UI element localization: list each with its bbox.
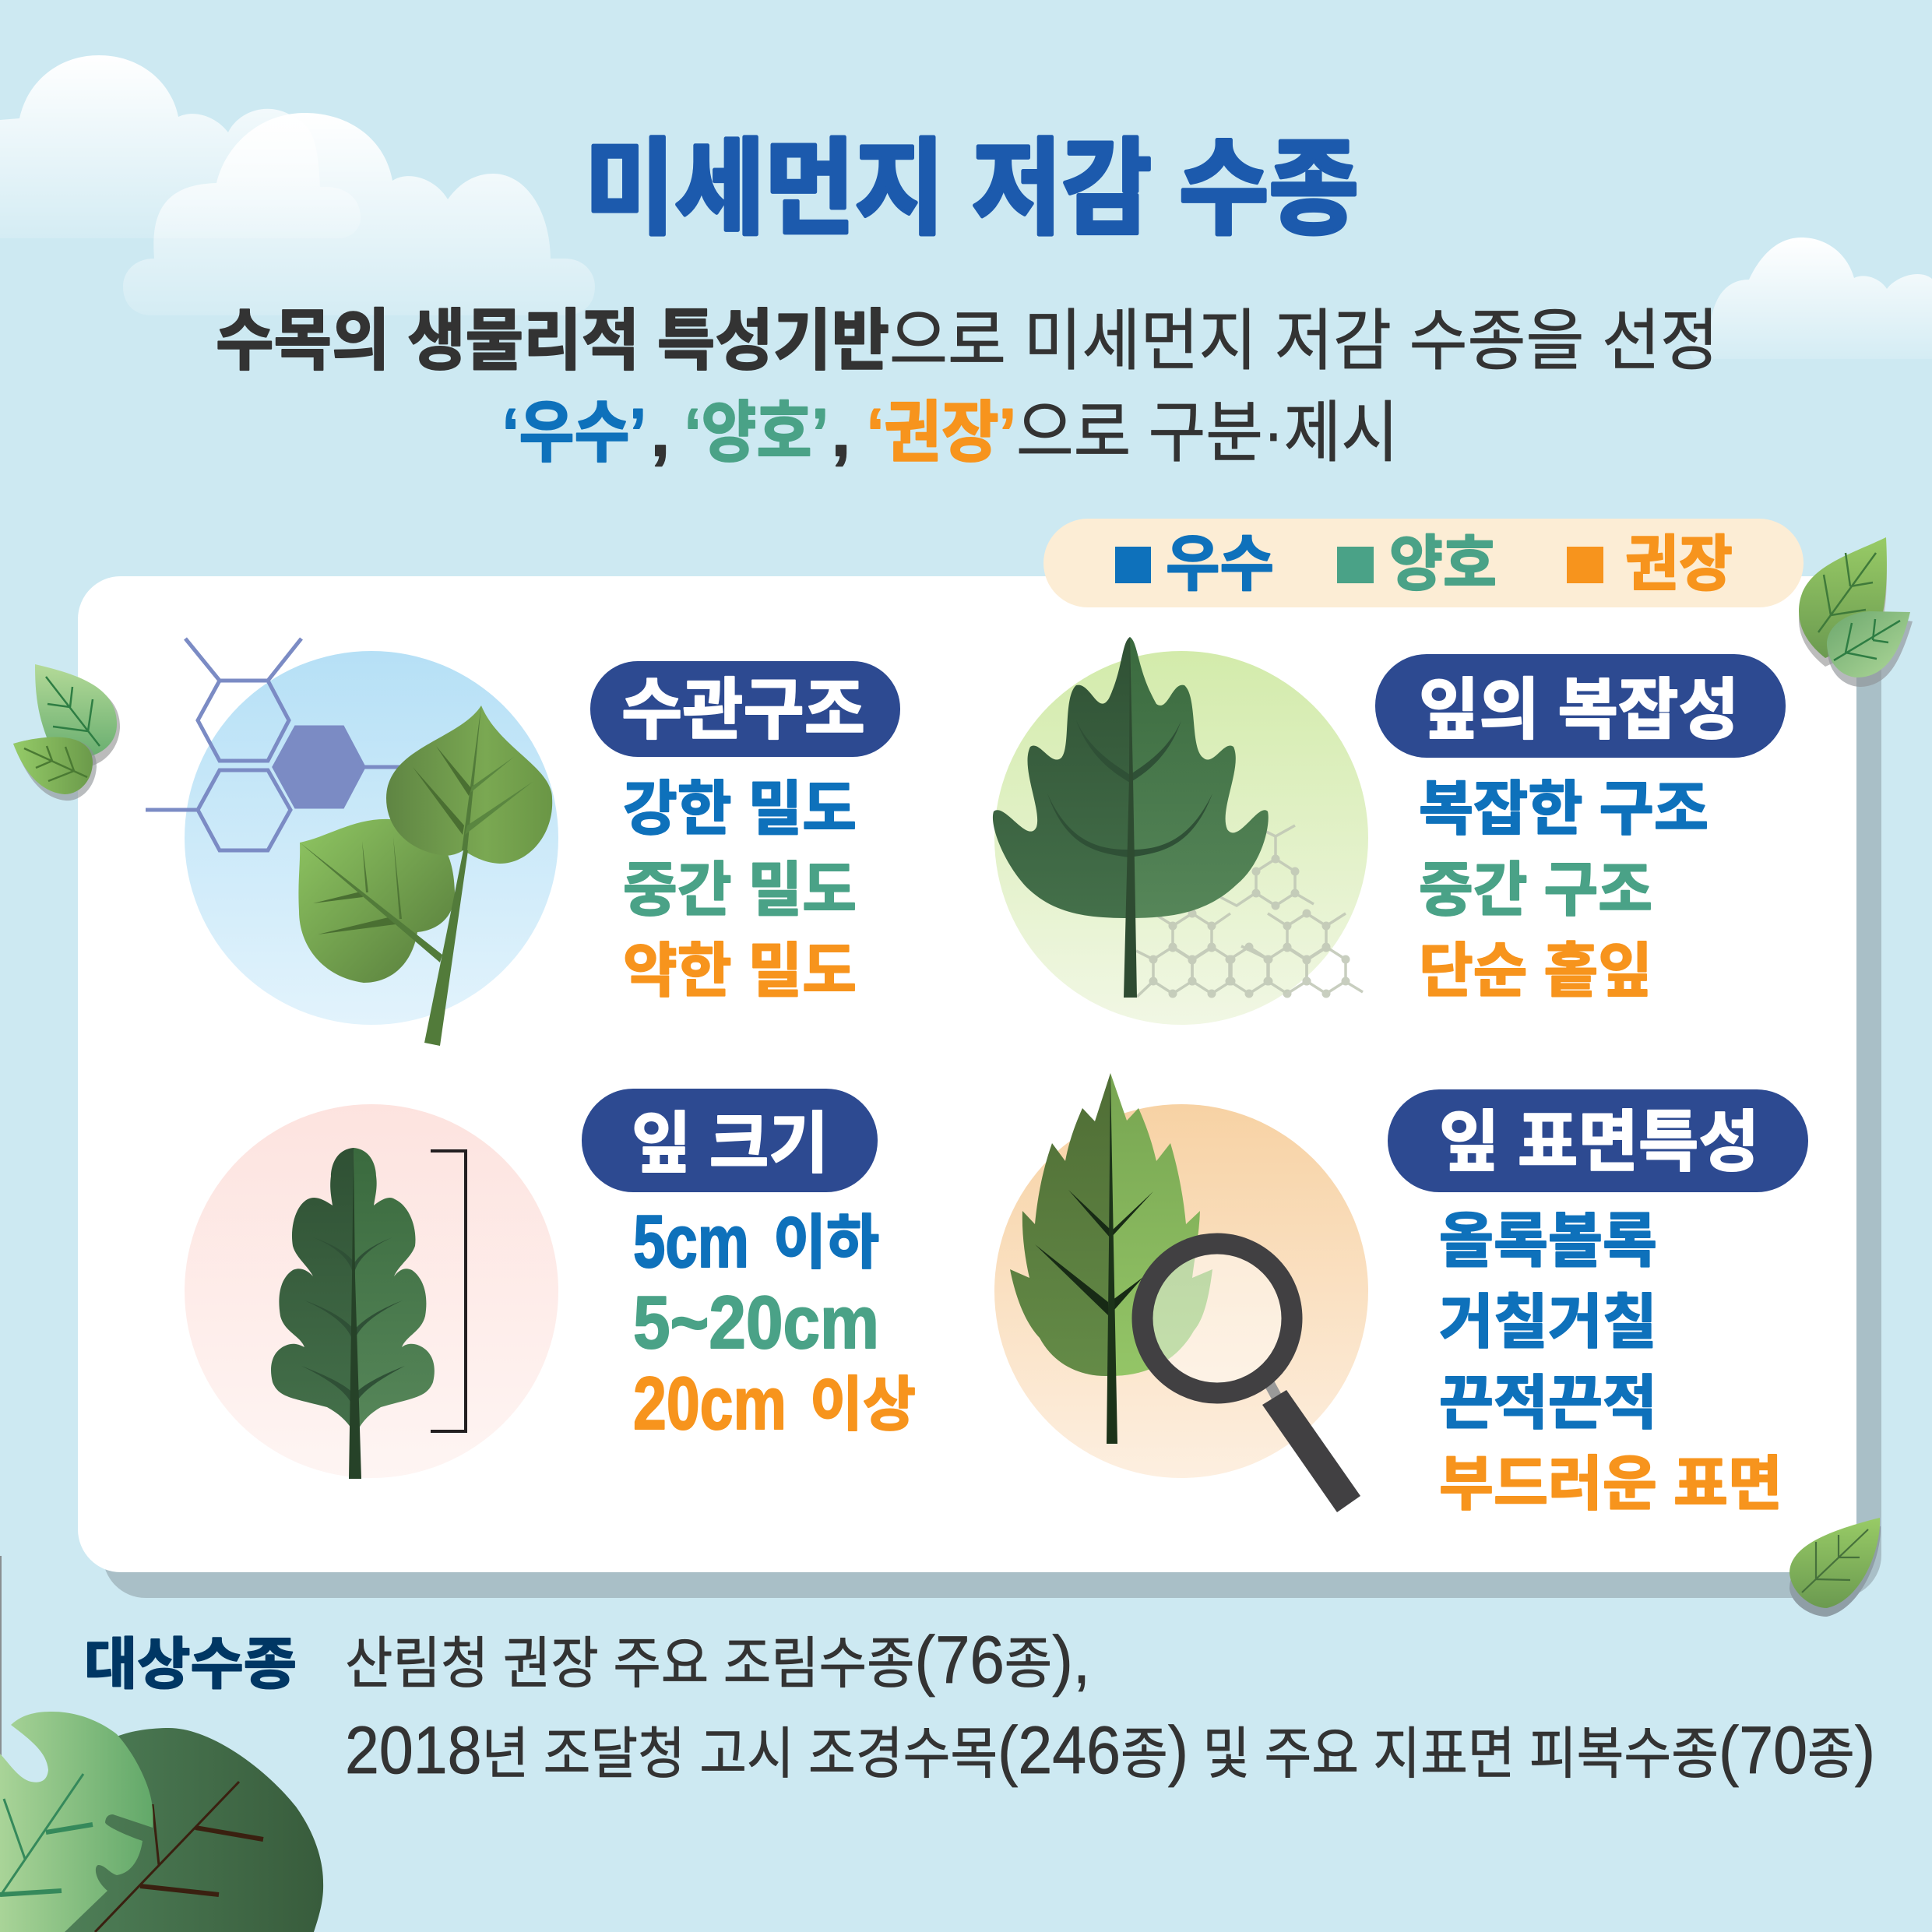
panel: white card with shadow (78, 576, 1881, 1598)
pill heading: 수관구조 (621, 673, 865, 748)
panel: leaf surface (994, 1073, 1808, 1518)
options: 거칠거칠 (1439, 1290, 1657, 1356)
panel: leaf size (185, 1089, 916, 1479)
subtitle: 으로 미세먼지 저감 수종을 선정 (889, 304, 1719, 378)
options (623, 776, 857, 1005)
legend: 권장 (1625, 530, 1733, 598)
icon: toothed leaf (1010, 1073, 1212, 1444)
options: 5~20cm (633, 1281, 879, 1364)
pill heading: 잎 표면특성 (1439, 1105, 1759, 1180)
options: 이상 (810, 1372, 916, 1438)
pill heading (1375, 654, 1786, 758)
pill heading (590, 661, 900, 757)
options: 이하 (773, 1210, 879, 1276)
icon: magnifier (1142, 1244, 1360, 1512)
icon: blue circle (185, 651, 558, 1025)
options (1419, 776, 1709, 1005)
footer: target species (84, 1623, 1875, 1788)
options (633, 1200, 916, 1445)
subtitle: ‘양호’ (684, 396, 829, 470)
subtitle (216, 304, 1719, 470)
pill heading (582, 1089, 878, 1192)
footer: target species: 산림청 권장 주요 조림수종(76종), (345, 1623, 1090, 1698)
options: 약한 밀도 (623, 938, 857, 1005)
pill heading: 잎 크기 (632, 1107, 829, 1181)
pill heading: 잎의 복잡성 (1419, 673, 1739, 748)
options: 부드러운 표면 (1439, 1452, 1782, 1518)
icon: orange circle (994, 1104, 1368, 1478)
options: 5cm (633, 1200, 749, 1283)
panel: crown structure (146, 639, 900, 1046)
legend: 우수 (1166, 530, 1274, 598)
icon: molecule (1136, 825, 1363, 998)
subtitle: , (651, 396, 670, 470)
options (1439, 1209, 1782, 1518)
options: 단순 홑잎 (1419, 938, 1652, 1005)
icon: side leaf bottom right (1789, 1518, 1881, 1617)
options: 복잡한 구조 (1419, 776, 1709, 843)
cloud: top left front (123, 113, 595, 315)
panel: leaf complexity (993, 637, 1786, 1025)
icon: large bottom left leaves (0, 1712, 323, 1932)
subtitle: ‘우수’ (502, 396, 646, 470)
icon: pink circle (185, 1104, 558, 1478)
subtitle: 으로 구분·제시 (1016, 396, 1399, 470)
options: 강한 밀도 (623, 776, 857, 843)
cloud: top right (1689, 238, 1932, 359)
options: 중간 구조 (1419, 857, 1652, 924)
options: 20cm (633, 1362, 787, 1445)
icon: lobed leaf (271, 1148, 435, 1479)
title: 미세먼지 저감 수종 (585, 130, 1359, 248)
icon: side leaves left (13, 664, 120, 801)
legend: 양호 (1389, 530, 1497, 598)
options: 중간 밀도 (623, 857, 857, 924)
pill heading (1388, 1089, 1808, 1192)
subtitle: 수목의 생물리적 특성기반 (216, 304, 889, 378)
icon: side leaves top right (1799, 537, 1913, 687)
icon: size bracket (431, 1151, 466, 1431)
cloud: top left back (0, 55, 361, 238)
subtitle: , (832, 396, 850, 470)
legend (1043, 519, 1804, 607)
icon: serrated leaf (993, 637, 1269, 998)
subtitle: ‘권장’ (867, 396, 1016, 470)
footer: target species: 2018년 조달청 고시 조경수목(246종) 및 주요 지표면 피복수종(70종) (345, 1713, 1875, 1788)
options: 올록볼록 (1439, 1209, 1657, 1275)
footer: target species: 대상수종 (84, 1634, 297, 1696)
icon: green circle (994, 651, 1368, 1025)
icon: hexagons (146, 639, 401, 850)
icon: branch with two leaves (298, 706, 552, 1046)
options: 끈적끈적 (1439, 1371, 1657, 1437)
